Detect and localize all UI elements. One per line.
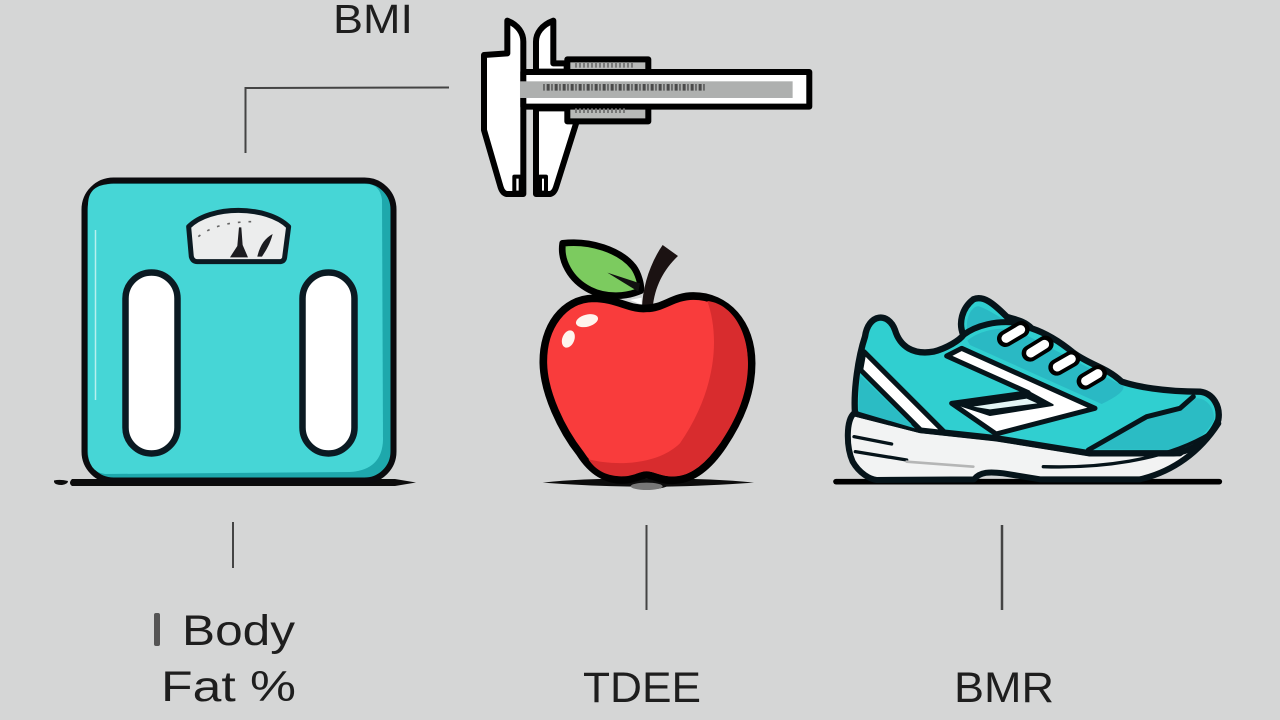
shoe toe line <box>1088 397 1193 450</box>
shoe laces <box>1005 329 1099 381</box>
label: Body Fat % <box>161 607 296 711</box>
label: Body Fat %: Fat % <box>161 663 296 711</box>
shoe heel panel <box>858 375 915 428</box>
caliper slider <box>567 59 648 121</box>
shoe chevron inner highlight <box>973 399 1037 409</box>
caliper moving jaw <box>536 21 577 194</box>
connector: TDEE <box>646 525 648 610</box>
apple leaf vein <box>607 273 640 292</box>
caliper beam <box>523 72 809 107</box>
shoe heel stripe <box>861 352 945 433</box>
apple leaf <box>562 243 641 296</box>
apple body <box>543 296 752 480</box>
shoe lace highlights <box>1006 330 1098 381</box>
label: BMR: BMR <box>954 664 1054 712</box>
shoe sole <box>848 413 1218 480</box>
shoe sole grooves <box>854 433 1210 467</box>
apple highlights <box>559 312 599 350</box>
icon: apple <box>543 243 754 490</box>
caliper fixed jaw <box>484 21 523 194</box>
icon: bathroom scale <box>54 180 416 486</box>
caliper scale strip <box>520 81 793 98</box>
shoe collar line <box>963 322 1015 335</box>
apple ground shadow <box>543 479 754 489</box>
shoe upper <box>855 298 1219 453</box>
connector: BMR <box>1001 525 1003 610</box>
shoe ground line <box>836 473 1219 490</box>
scale top face <box>88 184 383 474</box>
scale left foot pad <box>126 272 178 454</box>
shoe toe panel <box>1093 398 1214 450</box>
icon: caliper <box>484 21 809 194</box>
icon: running shoe <box>836 298 1219 482</box>
shoe tongue <box>967 306 1123 404</box>
connector: body fat <box>232 522 234 568</box>
apple stem <box>642 245 678 308</box>
caliper scale tick marks <box>543 77 707 97</box>
label: TDEE: TDEE <box>583 664 701 712</box>
shoe chevron inner <box>954 393 1053 415</box>
label: Body Fat %: Body <box>182 607 296 655</box>
connector: BMI to scale <box>246 88 449 153</box>
scale highlight <box>94 230 96 400</box>
apple notch highlight <box>630 298 642 305</box>
apple shaded side <box>588 301 748 476</box>
caliper jaw notches <box>514 177 546 193</box>
shoe side chevron <box>947 348 1095 434</box>
shoe sole grey groove <box>907 462 973 467</box>
scale dial <box>189 210 289 262</box>
caliper slider markings <box>575 65 635 111</box>
scale body <box>84 180 394 480</box>
scale ground line <box>54 479 416 486</box>
bullet mark <box>154 613 160 646</box>
scale right foot pad <box>302 272 354 454</box>
